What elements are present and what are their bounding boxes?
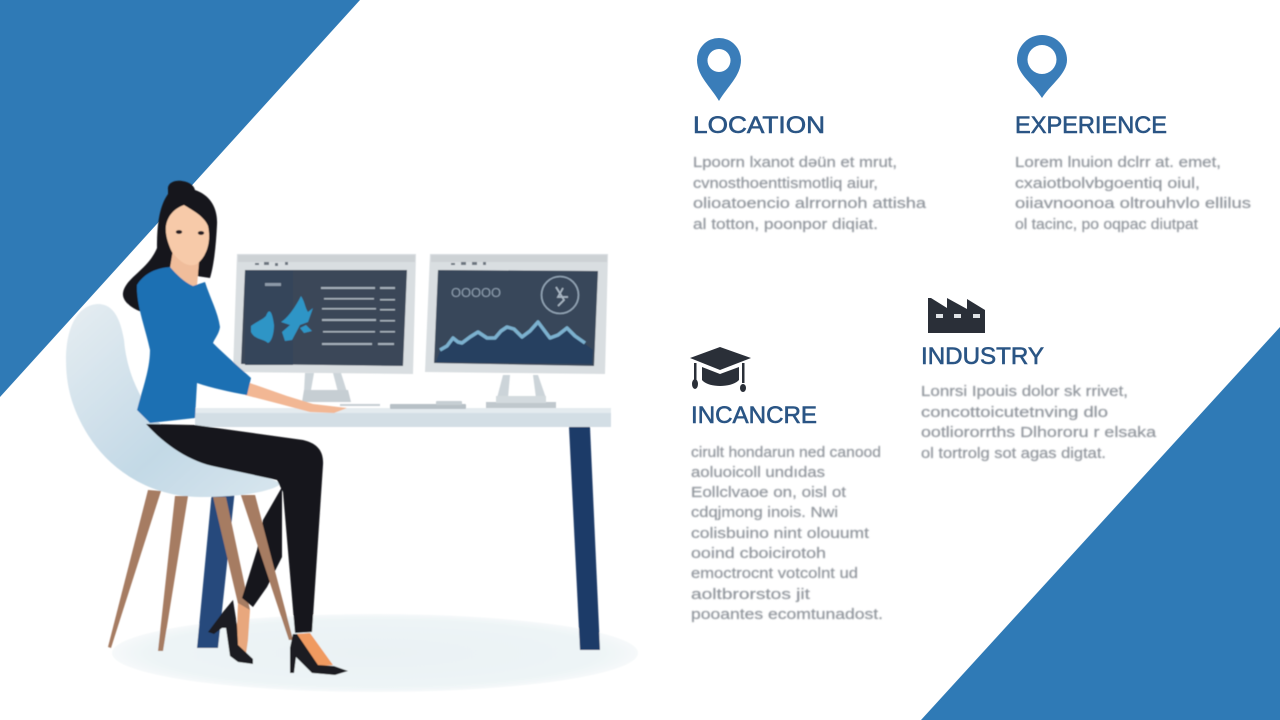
top-left blue triangle: [0, 0, 360, 397]
icon: experience pin: [1017, 35, 1067, 98]
circular gauge: [542, 276, 578, 314]
right monitor: [425, 254, 608, 408]
body text: ol tacinc, po oqpac diutpat: [1015, 216, 1199, 233]
icon: graduation cap: [690, 347, 751, 392]
body text: Eollclvaoe on, oisl ot: [691, 484, 847, 501]
hair: [123, 181, 217, 312]
desk left leg: [197, 480, 236, 648]
heading: LOCATION: [693, 112, 825, 139]
body text: aoluoicoll undıdas: [691, 464, 825, 481]
block: experience: [1015, 35, 1251, 233]
body text: ooind cboicirotoh: [691, 545, 826, 562]
block: incancre: [690, 347, 883, 623]
left foot and heel: [208, 600, 253, 664]
block: industry: [921, 298, 1157, 462]
screen label: OOOOO: [451, 285, 501, 300]
screen label left: [265, 283, 281, 286]
icon: location pin: [697, 38, 741, 101]
left monitor: [233, 254, 416, 402]
floor shadow: [112, 614, 638, 692]
body text: ootliororrths Dlhororu r elsaka: [921, 424, 1157, 441]
body text: cvnosthoenttismotliq aiur,: [693, 175, 878, 192]
body text: cdqjmong inois. Nwi: [691, 504, 838, 521]
icon: factory: [928, 298, 985, 333]
body text: ol tortrolg sot agas digtat.: [921, 445, 1106, 462]
body text: [691, 444, 883, 623]
body text: concottoicutetnving dlo: [921, 404, 1108, 421]
body text: al totton, poonpor diqiat.: [693, 216, 878, 233]
table lines on left screen: [321, 287, 395, 345]
right foot and heel: [290, 633, 348, 675]
body text: emoctrocnt votcolnt ud: [691, 565, 858, 582]
woman: [123, 181, 348, 675]
heading: INDUSTRY: [921, 343, 1044, 370]
neck: [170, 250, 200, 288]
line chart: [436, 323, 593, 364]
block: location: [693, 38, 927, 233]
chair shell: [66, 304, 281, 497]
heading: INCANCRE: [691, 402, 817, 429]
body text: pooantes ecomtunadost.: [691, 606, 883, 623]
body text: [693, 154, 927, 233]
chart: teal map shapes: [251, 296, 313, 343]
front leg: [146, 424, 323, 633]
arm and hand: [245, 382, 347, 413]
eyes: [176, 230, 204, 235]
chair legs: [108, 490, 293, 651]
redrawn chair leg over back leg: [241, 495, 293, 640]
body text: Lorem lnuion dclrr at. emet,: [1015, 154, 1221, 171]
body text: Lpoorn lxanot dəün et mrut,: [693, 154, 897, 171]
blue sweater: [137, 267, 251, 423]
bottom-right blue triangle: [921, 327, 1280, 720]
body text: colisbuino nint olouumt: [691, 525, 870, 542]
desk top: [195, 408, 611, 427]
body text: [1015, 154, 1251, 233]
body text: aoltbrorstos jit: [691, 586, 811, 603]
body text: oiiavnoonoa oltrouhvlo ellilus: [1015, 195, 1251, 212]
body text: Lonrsi Ipouis dolor sk rrivet,: [921, 383, 1128, 400]
body text: cirult hondarun ned canood: [691, 444, 881, 461]
back leg: [242, 487, 282, 607]
heading: EXPERIENCE: [1015, 112, 1167, 139]
illustration: woman at desk: [66, 181, 638, 692]
body text: [921, 383, 1157, 462]
keyboard: [340, 401, 466, 409]
desk right leg: [569, 427, 600, 650]
body text: cxaiotbolvbgoentiq oiul,: [1015, 175, 1200, 192]
body text: olioatoencio alrrornoh attisha: [693, 195, 927, 212]
face: [166, 205, 209, 265]
